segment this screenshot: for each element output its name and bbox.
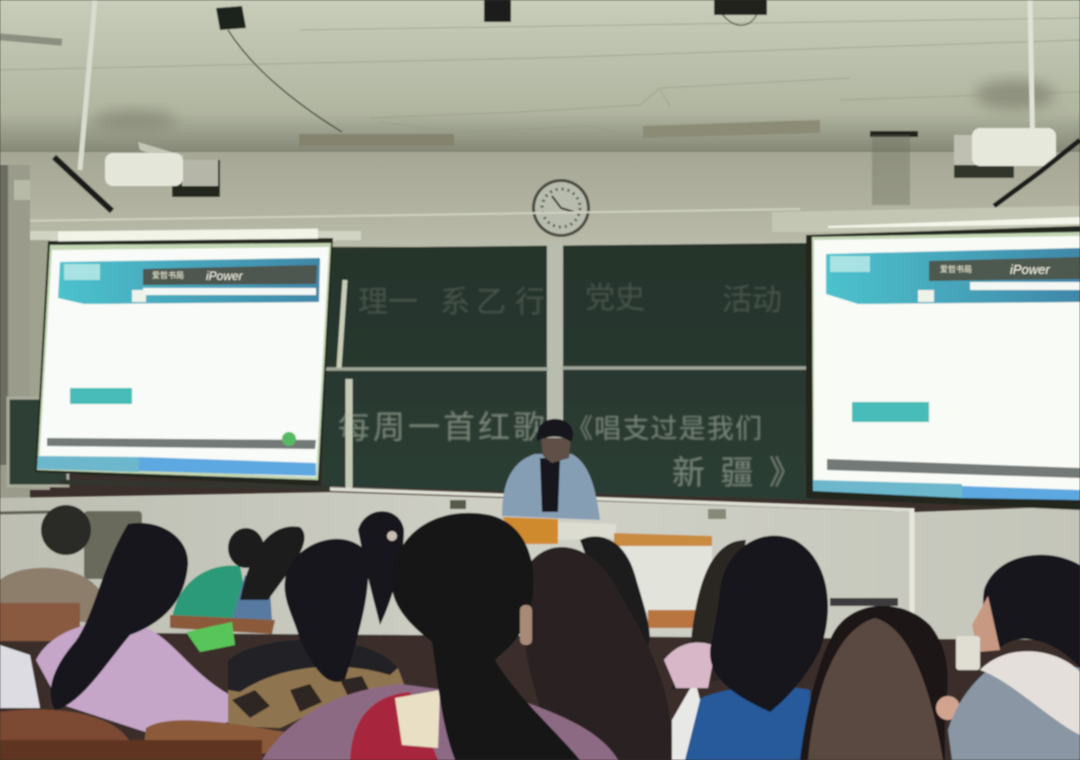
student foreground right front [800,606,960,760]
chalk text upper row: 乙 [476,286,506,319]
screen toolbar: 爱哲书局 [152,270,184,280]
chalk text upper row [358,282,782,319]
student far left [0,505,105,641]
chalk text lower row [338,409,802,491]
screen toolbar: iPower [206,269,244,283]
student green shirt [172,528,264,622]
screen toolbar: 爱哲书局 [940,264,972,274]
student center ponytail foreground [262,513,618,760]
screen toolbar: iPower [1010,262,1050,277]
student dark hair [232,526,305,620]
chalk text lower row: 每周一首红歌 [338,409,545,445]
lecturer jacket [502,454,600,520]
chalk text lower row: 新疆》 [672,454,802,491]
chalk tray and lower wall [0,482,1080,645]
student leopard top [228,539,408,728]
screen toolbar [58,258,320,304]
audience background students [0,505,746,690]
audience floor shadow [0,632,1080,760]
chalk text upper row: 行 [515,286,545,319]
desk and chairs foreground left [0,709,295,760]
student lilac hoodie [0,523,230,740]
wall clock [532,179,590,237]
student blue shirt [664,536,828,760]
right projector and microphone [870,0,1080,206]
upper wall [0,152,1080,247]
podium [502,517,712,628]
desks [170,615,275,634]
blackboard [322,243,812,500]
chalk text lower row: 《唱支过是我们 [566,414,762,444]
chalk text upper row: 系 [440,286,470,319]
chalk text upper row: 理一 [358,286,418,319]
lecturer face and hair [541,438,571,463]
screen bottom bar [37,432,316,476]
side wall and left pipes [0,165,68,510]
left projection screen [35,229,333,486]
left projector and microphone [54,0,220,211]
screen toolbar [826,248,1080,304]
board dividers [323,244,810,488]
lecturer [502,419,600,520]
wall trim above board [20,206,1080,245]
screen bottom bar [813,459,1080,500]
student grey hoodie right [830,555,1080,760]
student right of podium [580,536,650,650]
chalk text upper row: 活动 [722,284,782,317]
screen table [852,402,929,422]
right projection screen [806,217,1080,510]
student long dark hair [522,547,672,760]
student center back [358,511,404,625]
chalk text upper row: 党史 [585,282,645,315]
green folder on desk [186,622,235,652]
ceiling lights and speakers [0,0,820,146]
screen table [70,388,132,404]
ceiling [0,0,1080,160]
